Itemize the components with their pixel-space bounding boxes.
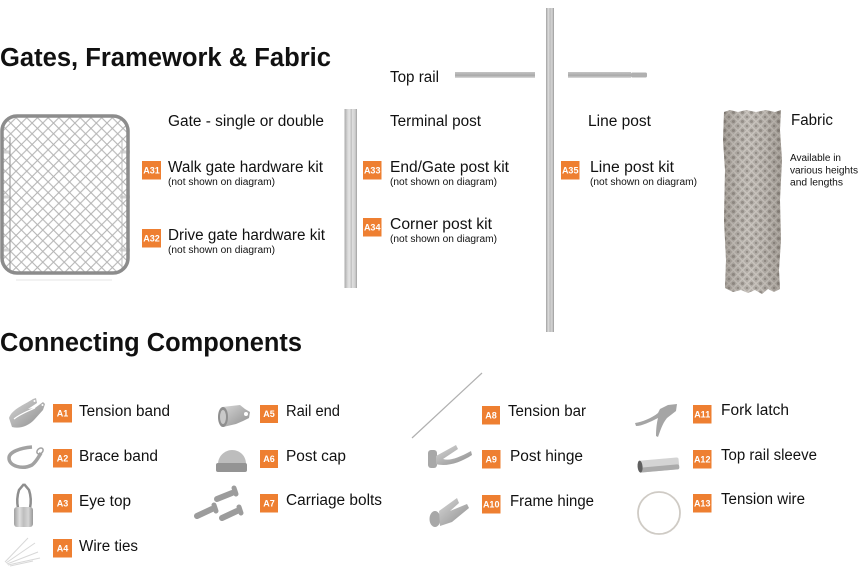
badge: A6 (260, 450, 278, 468)
icon: frame hinge (430, 498, 469, 527)
text: end/gate post kit: (not shown on diagram) (390, 177, 497, 188)
icon: tension band (9, 398, 45, 428)
badge: A34 (363, 218, 382, 236)
badge: A8: A8 (485, 410, 497, 420)
badge: A32 (142, 229, 161, 248)
text: line post kit: (not shown on diagram) (590, 177, 697, 188)
badge: A13 (693, 494, 712, 512)
text: frame hinge: Frame hinge (510, 493, 594, 510)
badge: A31: A31 (143, 166, 160, 176)
icon: top rail left section (455, 72, 535, 78)
badge: A12: A12 (694, 454, 710, 464)
icon: top rail sleeve (637, 457, 679, 473)
text: brace band: Brace band (79, 448, 158, 465)
badge: A13: A13 (694, 498, 710, 508)
icon: post hinge (428, 445, 472, 468)
icon: gate (1, 116, 130, 280)
text: tension wire: Tension wire (721, 491, 805, 508)
text: drive gate hardware kit (168, 227, 326, 256)
badge: A4 (53, 539, 72, 558)
badge: A2 (53, 449, 72, 468)
badge: A7 (260, 494, 278, 512)
text: fabric availability note (790, 153, 858, 188)
badge: A6: A6 (263, 454, 275, 464)
badge: A2: A2 (57, 454, 68, 464)
badge: A34: A34 (364, 222, 380, 232)
title: Gates, Framework & Fabric: Gates, Framework & Fabric (0, 44, 331, 72)
badge: A10 (482, 495, 500, 514)
icon: carriage bolts (197, 488, 241, 518)
text: walk gate hardware kit: Walk gate hardware kit (168, 159, 324, 176)
badge: A3: A3 (57, 498, 68, 508)
badge: A4: A4 (57, 544, 68, 554)
text: drive gate hardware kit: (not shown on diagram) (168, 245, 275, 256)
badge: A33: A33 (364, 166, 380, 176)
badge: A5 (260, 405, 278, 423)
text: eye top: Eye top (79, 493, 131, 510)
badge: A10: A10 (483, 500, 499, 510)
text: end/gate post kit: End/Gate post kit (390, 159, 510, 176)
icon: tension wire (638, 492, 680, 534)
heading: Connecting Components: Connecting Components (0, 329, 302, 357)
badge: A35 (561, 161, 580, 180)
text: rail end: Rail end (286, 403, 340, 420)
text: carriage bolts: Carriage bolts (286, 492, 382, 509)
text: walk gate hardware kit (168, 159, 324, 188)
badge: A35: A35 (562, 166, 578, 176)
icon: line post (546, 8, 554, 332)
text: wire ties: Wire ties (79, 538, 138, 555)
text: fabric availability note: various heights (790, 166, 858, 176)
text: fork latch: Fork latch (721, 402, 789, 419)
icon: fork latch (635, 404, 677, 437)
badge: A9: A9 (485, 454, 497, 464)
icon: tension bar (412, 373, 482, 438)
badge: A7: A7 (263, 498, 275, 508)
badge: A12 (693, 450, 712, 468)
text: terminal post label: Terminal post (390, 113, 482, 130)
text: line post kit: Line post kit (590, 159, 675, 176)
text: end/gate post kit (390, 159, 510, 188)
icon: post cap (216, 450, 247, 472)
badge: A8 (482, 406, 500, 424)
icon: brace band (9, 447, 44, 467)
text: walk gate hardware kit: (not shown on diagram) (168, 177, 275, 188)
icon: top rail right section (568, 72, 647, 78)
icon: eye top (14, 484, 33, 527)
icon: rail end (218, 405, 250, 427)
icon: wire ties (5, 538, 40, 566)
text: top rail sleeve: Top rail sleeve (721, 447, 817, 464)
badge: A31 (142, 161, 161, 180)
text: top rail label: Top rail (390, 69, 439, 86)
text: fabric availability note: and lengths (790, 178, 843, 188)
text: post hinge: Post hinge (510, 448, 583, 465)
icon: terminal post (344, 109, 357, 288)
text: corner post kit: (not shown on diagram) (390, 234, 497, 245)
text: fabric label: Fabric (791, 112, 833, 129)
text: corner post kit: Corner post kit (390, 216, 493, 233)
text: line post label: Line post (588, 113, 652, 130)
badge: A11 (693, 405, 712, 424)
badge: A32: A32 (143, 234, 160, 244)
badge: A5: A5 (263, 409, 275, 419)
text: fabric availability note: Available in (790, 153, 841, 164)
badge: A1: A1 (57, 408, 68, 418)
badge: A33 (363, 161, 382, 180)
text: drive gate hardware kit: Drive gate hardware kit (168, 227, 326, 244)
text: tension bar: Tension bar (508, 403, 586, 420)
icon: fabric roll (723, 110, 782, 294)
text: tension band: Tension band (79, 403, 170, 420)
badge: A9 (482, 450, 500, 468)
badge: A1 (53, 404, 72, 422)
text: line post kit (590, 159, 697, 188)
badge: A11: A11 (694, 410, 710, 420)
text: post cap: Post cap (286, 448, 346, 465)
badge: A3 (53, 494, 72, 512)
text: corner post kit (390, 216, 497, 245)
text: gate label: Gate - single or double (168, 113, 324, 130)
